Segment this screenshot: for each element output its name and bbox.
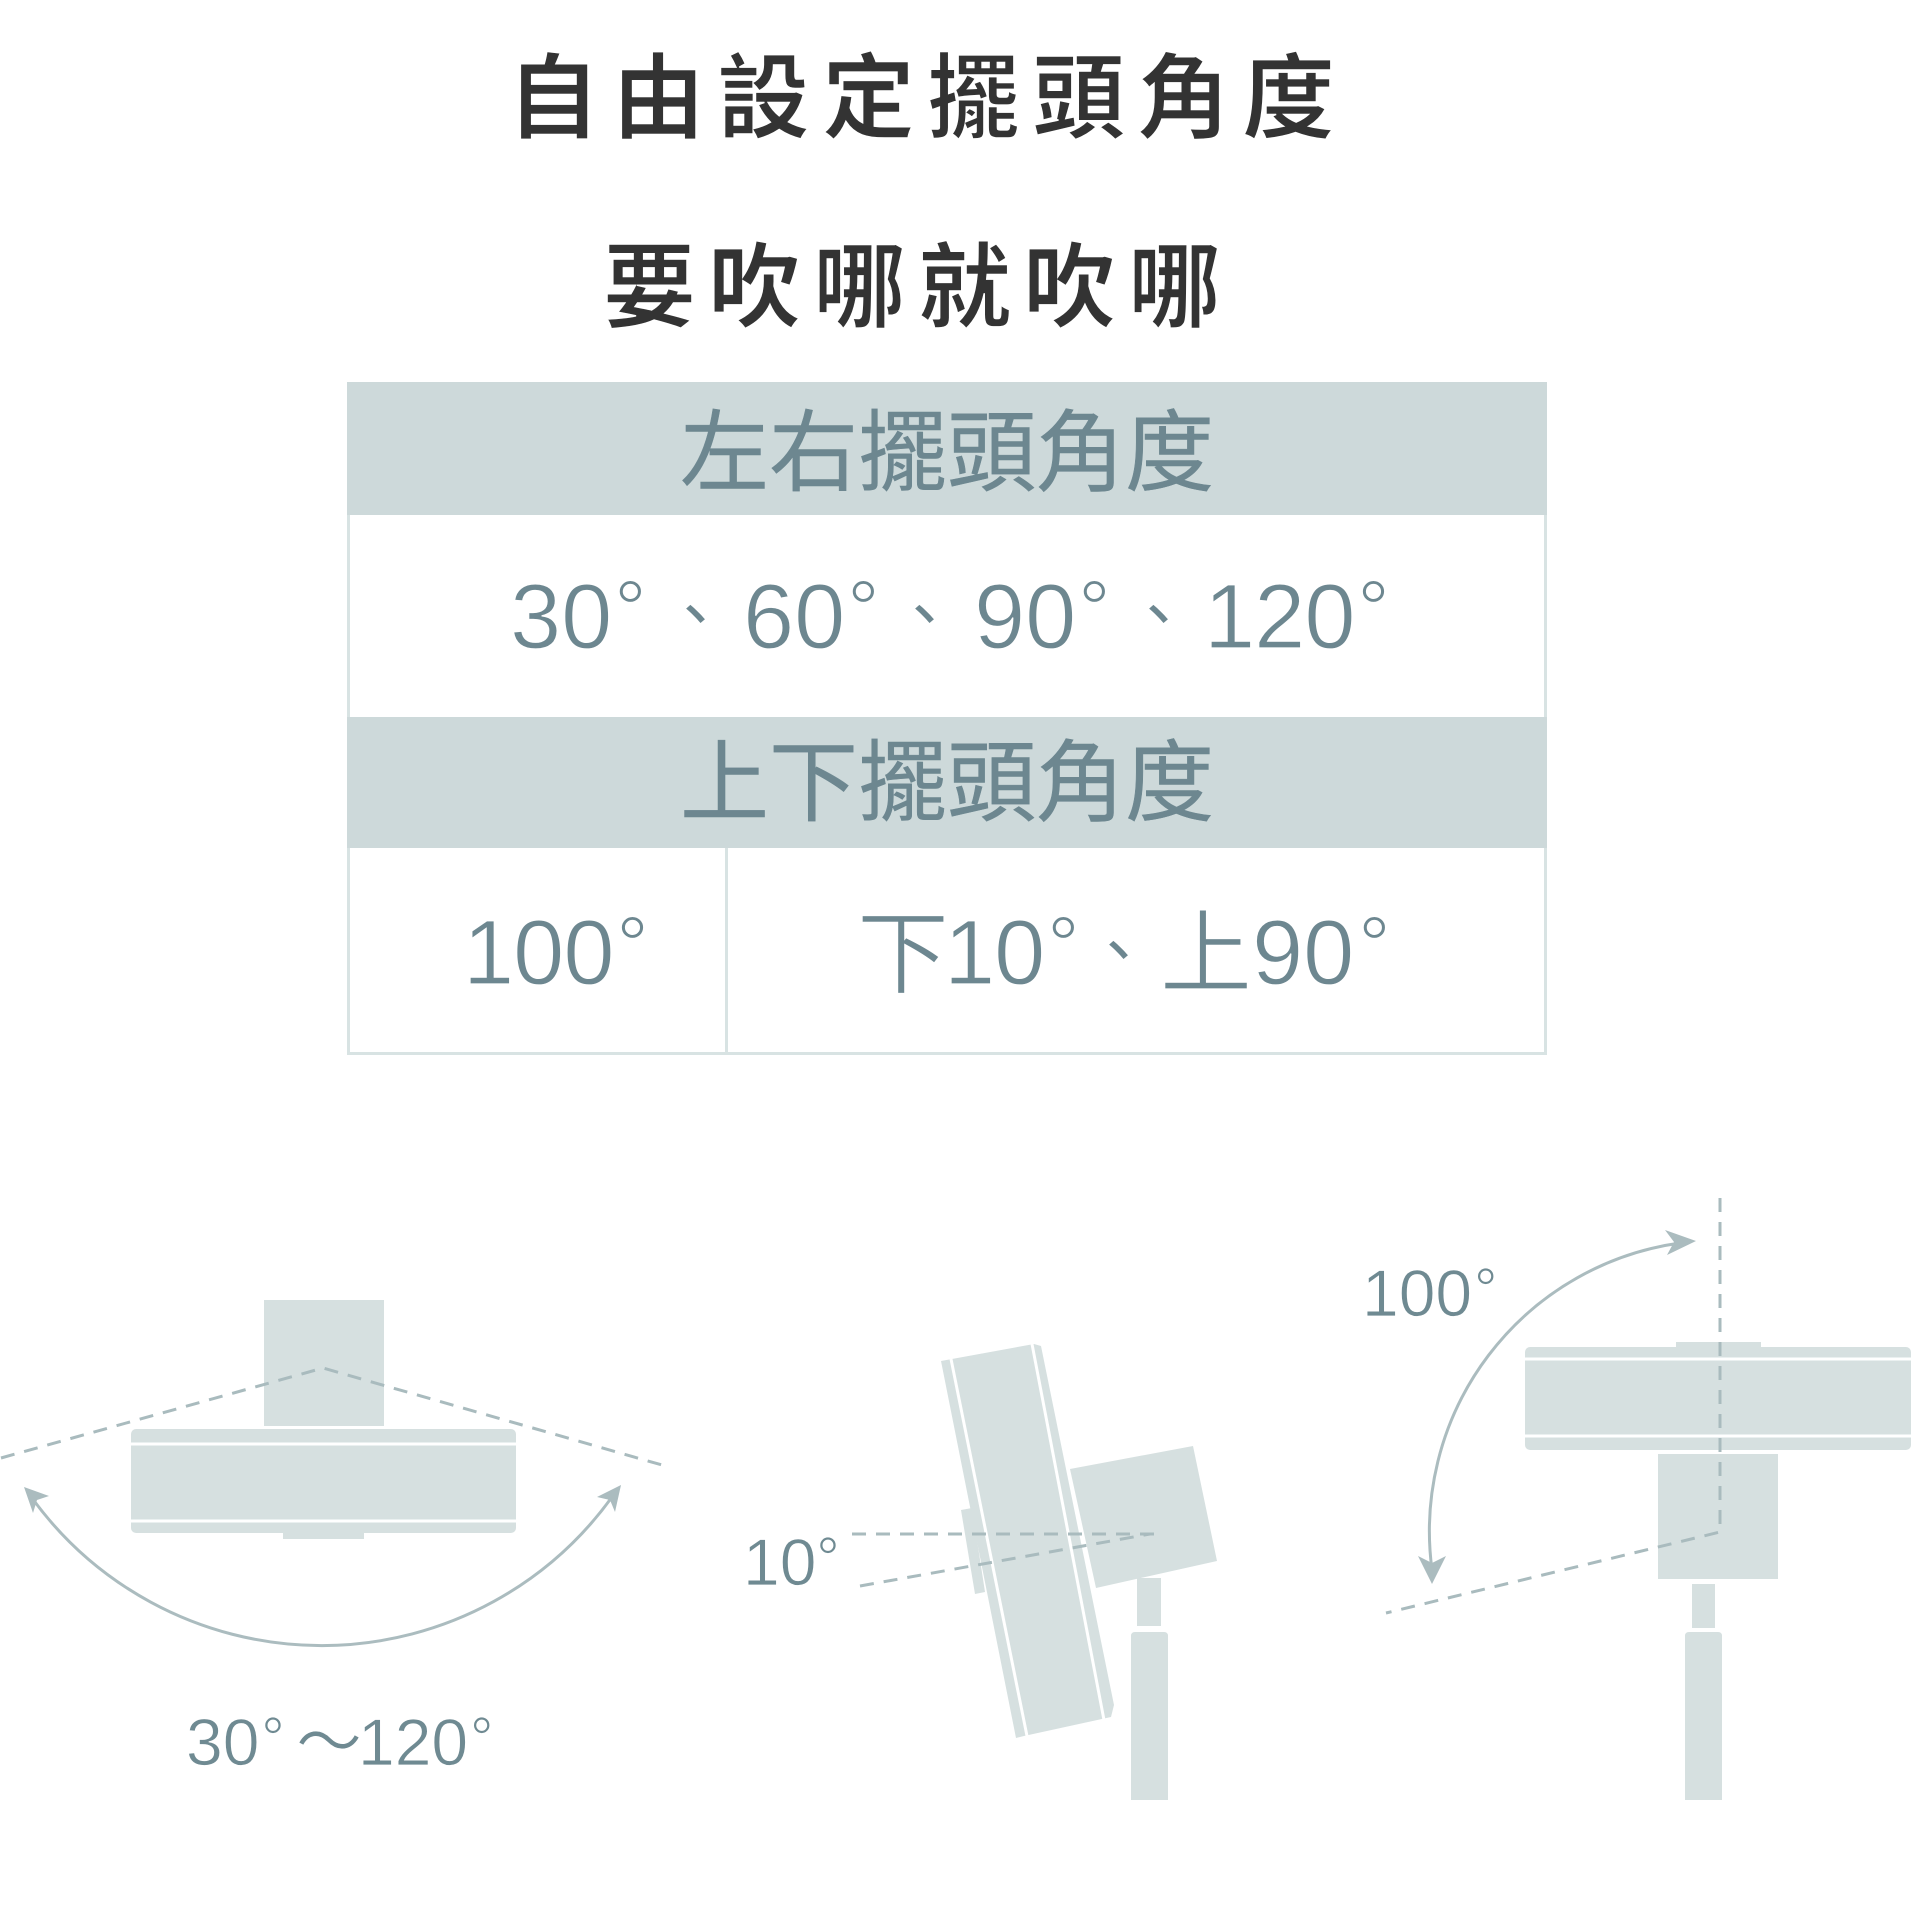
arrowhead bottom	[1418, 1556, 1446, 1584]
label: 100 degrees: 100	[1362, 1256, 1472, 1330]
label: 30 to 120 degrees	[186, 1705, 493, 1779]
fan head lines	[1525, 1359, 1911, 1436]
diagram: top view left-right swing	[1, 1300, 662, 1779]
diagram: side view tilt 10 degrees	[743, 1344, 1217, 1800]
arrowhead left	[24, 1487, 49, 1513]
label: 30 to 120 degrees: °	[470, 1706, 493, 1771]
value: down 10 up 90: 10	[944, 902, 1044, 1004]
title line 2: 要吹哪就吹哪	[603, 236, 1233, 340]
value: down 10 up 90: °	[1047, 900, 1078, 989]
value: down 10 up 90	[857, 900, 1390, 1006]
label: 10 degrees: °	[816, 1526, 840, 1591]
row values: left-right angles: °	[614, 564, 646, 653]
motor box	[1658, 1454, 1778, 1579]
row values: left-right angles: 120	[1204, 566, 1354, 668]
row values: left-right angles	[510, 564, 1388, 668]
fan head lines	[131, 1444, 516, 1521]
value: down 10 up 90: 下	[857, 904, 949, 1006]
label: 10 degrees: 10	[743, 1525, 816, 1599]
label: 30 to 120 degrees: 30	[186, 1705, 259, 1779]
header text: left-right angle: 左右擺頭角度	[680, 403, 1214, 503]
value: down 10 up 90: 上	[1160, 904, 1252, 1006]
neck	[1137, 1578, 1161, 1626]
dashed reference lines	[1386, 1198, 1720, 1613]
row values: left-right angles: 、	[892, 579, 957, 652]
arrowhead top	[1665, 1230, 1696, 1255]
header text: up-down angle: 上下擺頭角度	[680, 733, 1214, 833]
row values: left-right angles: 、	[1126, 579, 1191, 652]
title line 1: 自由設定擺頭角度	[507, 47, 1347, 151]
dashed reference lines	[852, 1534, 1154, 1586]
row values: left-right angles: °	[1078, 564, 1110, 653]
diagram: side view 100 degrees	[1362, 1198, 1911, 1800]
fan tab	[1676, 1342, 1761, 1352]
header band: left-right	[347, 382, 1547, 515]
row values: left-right angles: 90	[974, 566, 1076, 668]
value: 100 degrees: °	[616, 900, 648, 989]
motor box tilted	[1070, 1446, 1217, 1588]
label: 30 to 120 degrees: °	[261, 1706, 285, 1771]
neck	[1692, 1584, 1715, 1628]
table outline	[348, 384, 1546, 1054]
white lines on head	[951, 1344, 1104, 1736]
row values: left-right angles: 60	[743, 566, 845, 668]
range arc	[1429, 1243, 1680, 1570]
fan front tab	[283, 1533, 364, 1539]
value: down 10 up 90: 90	[1252, 902, 1354, 1004]
header band: up-down	[347, 717, 1547, 848]
row values: left-right angles: °	[847, 564, 879, 653]
label: 30 to 120 degrees: ～	[296, 1705, 362, 1779]
fan motor box	[264, 1300, 384, 1426]
fan head tilted	[941, 1344, 1114, 1738]
stem	[1131, 1632, 1168, 1800]
value: 100 degrees: 100	[463, 902, 614, 1004]
swing arc	[32, 1497, 612, 1646]
divider	[725, 848, 728, 1054]
angle table	[347, 382, 1547, 1054]
fan head	[131, 1429, 516, 1533]
row values: left-right angles: 30	[510, 566, 612, 668]
arrowhead right	[597, 1485, 621, 1512]
value: down 10 up 90: 、	[1086, 915, 1151, 988]
label: 30 to 120 degrees: 120	[358, 1705, 468, 1779]
fan head	[1525, 1347, 1911, 1450]
front tab	[961, 1508, 985, 1594]
label: 100 degrees: °	[1474, 1257, 1497, 1322]
row values: left-right angles: °	[1358, 564, 1388, 653]
stem	[1685, 1632, 1722, 1800]
row values: left-right angles: 、	[663, 579, 728, 652]
value: down 10 up 90: °	[1358, 900, 1390, 989]
dashed swing limits	[1, 1368, 662, 1465]
